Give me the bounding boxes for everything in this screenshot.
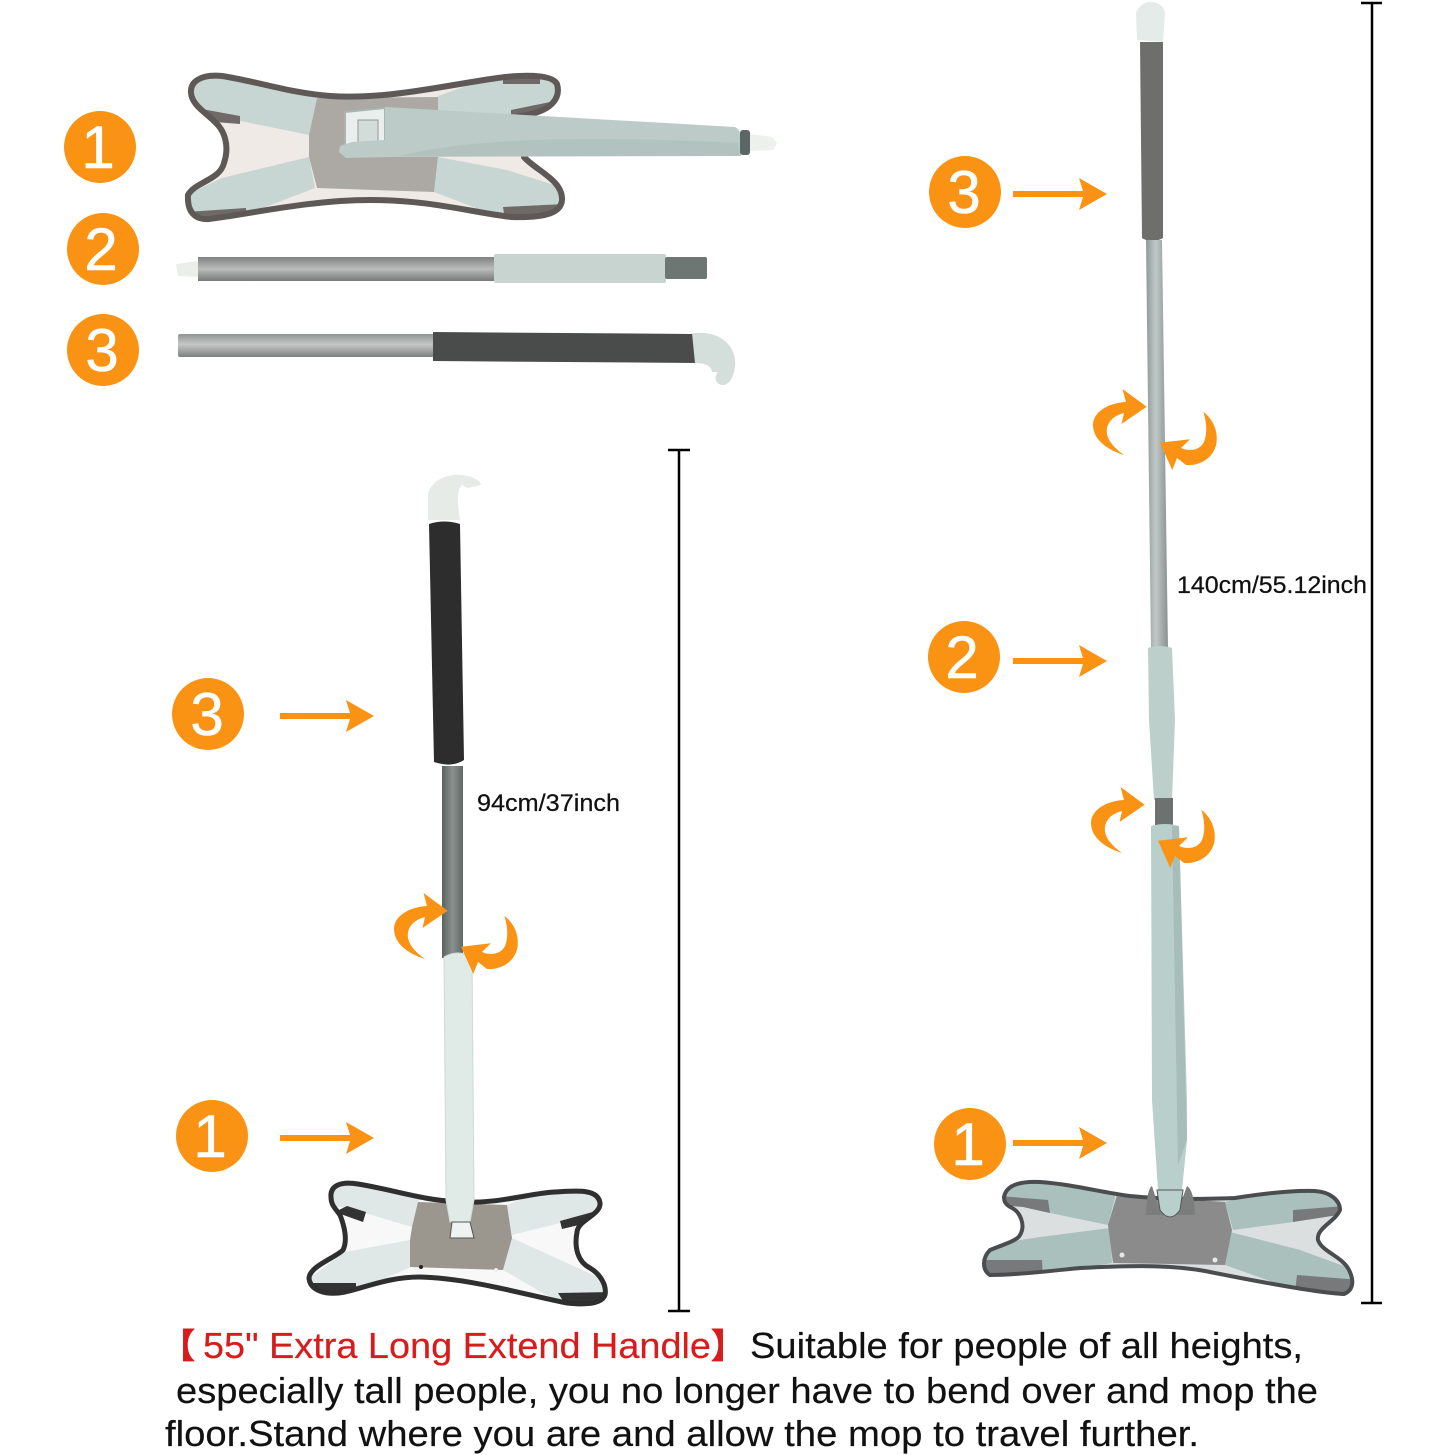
telescopic handle (1136, 2, 1195, 1217)
number badge 3 (67, 314, 139, 386)
height label 140cm: 140cm/55.12inch (1177, 572, 1367, 599)
number badge 2 (67, 213, 139, 285)
panel: disassembled parts (64, 70, 777, 386)
dimension bracket short (668, 450, 690, 1311)
panel: short assembled mop (172, 450, 690, 1311)
number badge 3 (172, 678, 244, 750)
number badge 1 (176, 1100, 248, 1172)
red heading: 55" Extra Long Extend Handle (203, 1325, 711, 1366)
handle section 2 (176, 254, 707, 283)
mop head (975, 1175, 1360, 1300)
mop head (306, 1180, 608, 1306)
twist arrows lower (1091, 787, 1215, 868)
handle section 3 (178, 332, 735, 385)
arrow to part 1 (1013, 1127, 1107, 1159)
number badge 1 (64, 111, 136, 183)
height label 94cm: 94cm/37inch (477, 790, 620, 817)
number badge 2 (928, 621, 1000, 693)
arrow to part 3 (280, 700, 374, 732)
red heading: 【 (161, 1328, 195, 1366)
description line 3: floor.Stand where you are and allow the mop to travel further. (165, 1413, 1199, 1454)
number badge 1: 1 (81, 114, 115, 181)
twist arrows (394, 893, 518, 974)
red heading: 】 (711, 1328, 745, 1366)
dimension bracket tall (1361, 3, 1382, 1303)
number badge 1: 1 (193, 1103, 227, 1170)
number badge 3: 3 (190, 681, 224, 748)
mop head top view with handle (180, 70, 777, 225)
handle with hook (428, 475, 481, 1238)
description text (161, 1325, 1318, 1454)
number badge 2: 2 (945, 624, 979, 691)
number badge 2: 2 (84, 216, 118, 283)
arrow to part 3 (1013, 178, 1107, 210)
number badge 3: 3 (947, 159, 981, 226)
panel: long assembled mop (928, 2, 1382, 1303)
arrow to part 2 (1013, 645, 1107, 677)
number badge 1 (934, 1108, 1006, 1180)
number badge 3: 3 (85, 317, 119, 384)
twist arrows upper (1093, 389, 1217, 470)
number badge 3 (929, 156, 1001, 228)
arrow to part 1 (280, 1122, 374, 1154)
description line 1: Suitable for people of all heights, (750, 1325, 1303, 1366)
description line 2: especially tall people, you no longer have to bend over and mop the (176, 1370, 1318, 1411)
number badge 1: 1 (951, 1111, 985, 1178)
